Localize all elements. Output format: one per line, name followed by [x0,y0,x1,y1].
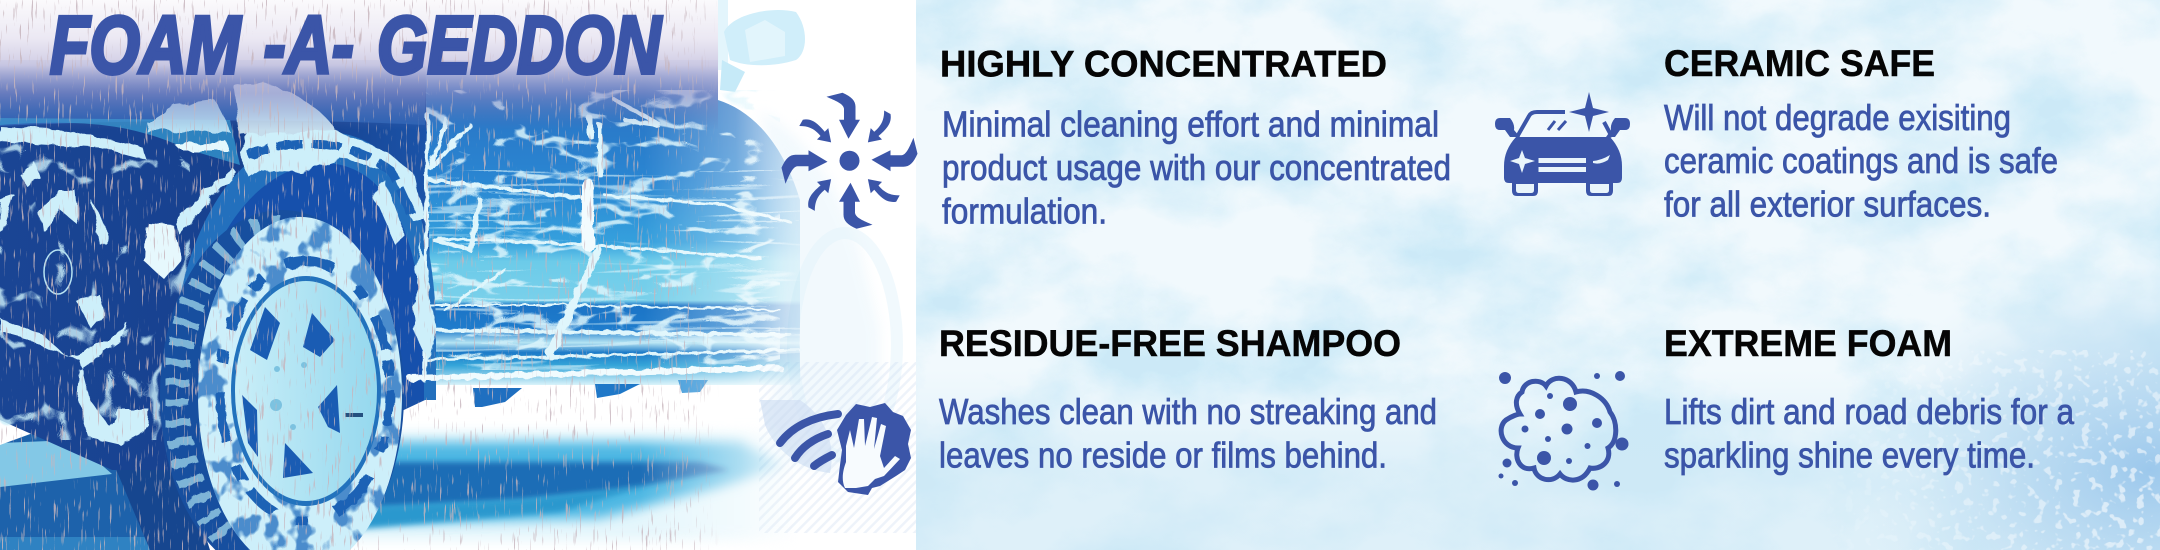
rain speckle overlay [0,0,720,550]
icon: foam bubbles [1498,371,1628,490]
icon: burst of arrows [782,93,918,229]
wheel arch interior [226,164,424,400]
dark rear quarter [0,60,432,470]
body text [1664,97,2058,225]
body text [939,391,1437,476]
feature: highly concentrated [782,44,1451,231]
feature: ceramic safe [1495,43,2058,225]
quarter foam web [0,130,190,440]
icon: car with sparkle [1495,92,1630,196]
rear reflector ring [44,250,72,294]
panel: foam texture background [916,0,2160,550]
tread blocks [166,215,280,543]
side mirror [718,0,805,92]
body text: for all exterior surfaces. [1664,184,1991,225]
heading: CERAMIC SAFE [1664,43,1935,84]
body text: sparkling shine every time. [1664,435,2035,476]
door horizontal foam lines [420,170,800,370]
dark tyre [160,210,404,550]
alloy rim [231,276,381,506]
quarter panel foam patches [0,83,436,445]
sidewall dark patches [220,261,390,521]
body text: Minimal cleaning effort and minimal [942,104,1439,145]
body text: Will not degrade exisiting [1664,97,2011,138]
wheel arch band [172,132,436,400]
door foam web [420,90,780,370]
hub [270,362,363,430]
ground [340,432,800,540]
car door and sill [400,60,800,385]
feature: extreme foam [1498,323,2075,490]
panel: foam covered car photo [0,0,917,550]
door foam streaks [410,100,800,380]
sidewall mottling [190,210,410,550]
body text: ceramic coatings and is safe [1664,140,2058,181]
heading: RESIDUE-FREE SHAMPOO [939,323,1401,364]
ground at far left [0,434,210,550]
body text: Washes clean with no streaking and [939,391,1437,432]
body text [942,104,1451,231]
faded car front [760,110,897,473]
body text [1664,391,2075,476]
body text: Lifts dirt and road debris for a [1664,391,2075,432]
body text: formulation. [942,190,1107,231]
hatched panel [759,362,917,533]
icon: hand wiping with cloth [780,403,911,495]
rim windows [242,307,340,478]
heading: HIGHLY CONCENTRATED [940,44,1387,84]
underside blocks [473,380,708,407]
arch band dark segments [248,144,412,215]
title: FOAM -A- GEDDON [50,0,662,91]
sidewall foam [198,217,402,550]
body text: product usage with our concentrated [942,147,1451,188]
top fade band [0,0,718,130]
feature: residue-free shampoo [780,323,1437,495]
body text: leaves no reside or films behind. [939,435,1387,476]
heading: EXTREME FOAM [1664,323,1952,364]
